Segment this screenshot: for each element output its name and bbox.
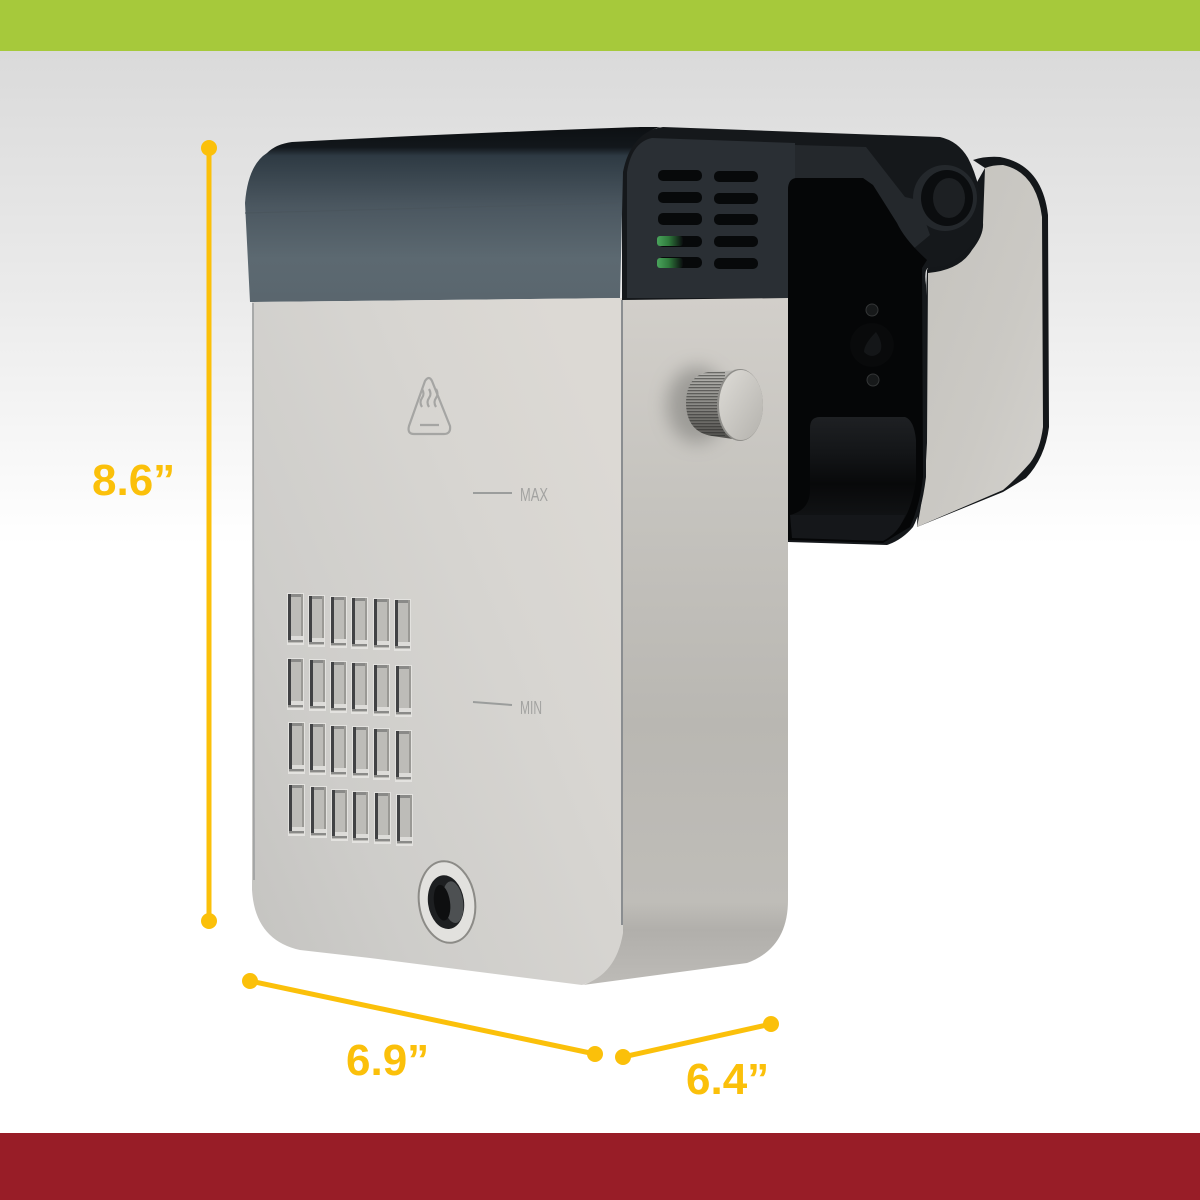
stainless side face: [583, 298, 788, 985]
green top band: [0, 0, 1200, 51]
width dimension: [242, 973, 603, 1085]
red bottom band: [0, 1133, 1200, 1200]
head and central body silhouette: [622, 127, 983, 545]
max line: [473, 485, 548, 505]
face edge lines: [253, 303, 254, 880]
green indicator lights: [657, 236, 683, 268]
min line: [473, 698, 542, 718]
head front panel: [245, 127, 660, 302]
vent grid: [287, 593, 413, 846]
stainless front face: [252, 298, 623, 985]
temperature sensor dots: [850, 304, 894, 386]
head seam: [245, 203, 618, 213]
height dimension: 8.6”: [92, 456, 175, 505]
thumb screw: [667, 367, 763, 443]
vents on head: [658, 170, 758, 269]
background gradient: [0, 50, 1200, 545]
power button: [913, 165, 977, 231]
hot surface warning icon: [409, 378, 450, 434]
cavity lower block: [790, 417, 916, 525]
width dimension: 6.9”: [346, 1036, 429, 1085]
min line: MIN: [520, 698, 542, 718]
max line: MAX: [520, 485, 548, 505]
upper head strip: [795, 145, 930, 250]
height dimension: [92, 140, 217, 929]
depth dimension: 6.4”: [686, 1055, 769, 1104]
depth dimension: [615, 1016, 779, 1104]
rear housing: [917, 157, 1049, 527]
dark center cavity: [788, 178, 927, 543]
drain port: [414, 858, 480, 946]
product: sous vide cooker: [245, 127, 1049, 985]
head side panel with vents: [627, 138, 795, 298]
